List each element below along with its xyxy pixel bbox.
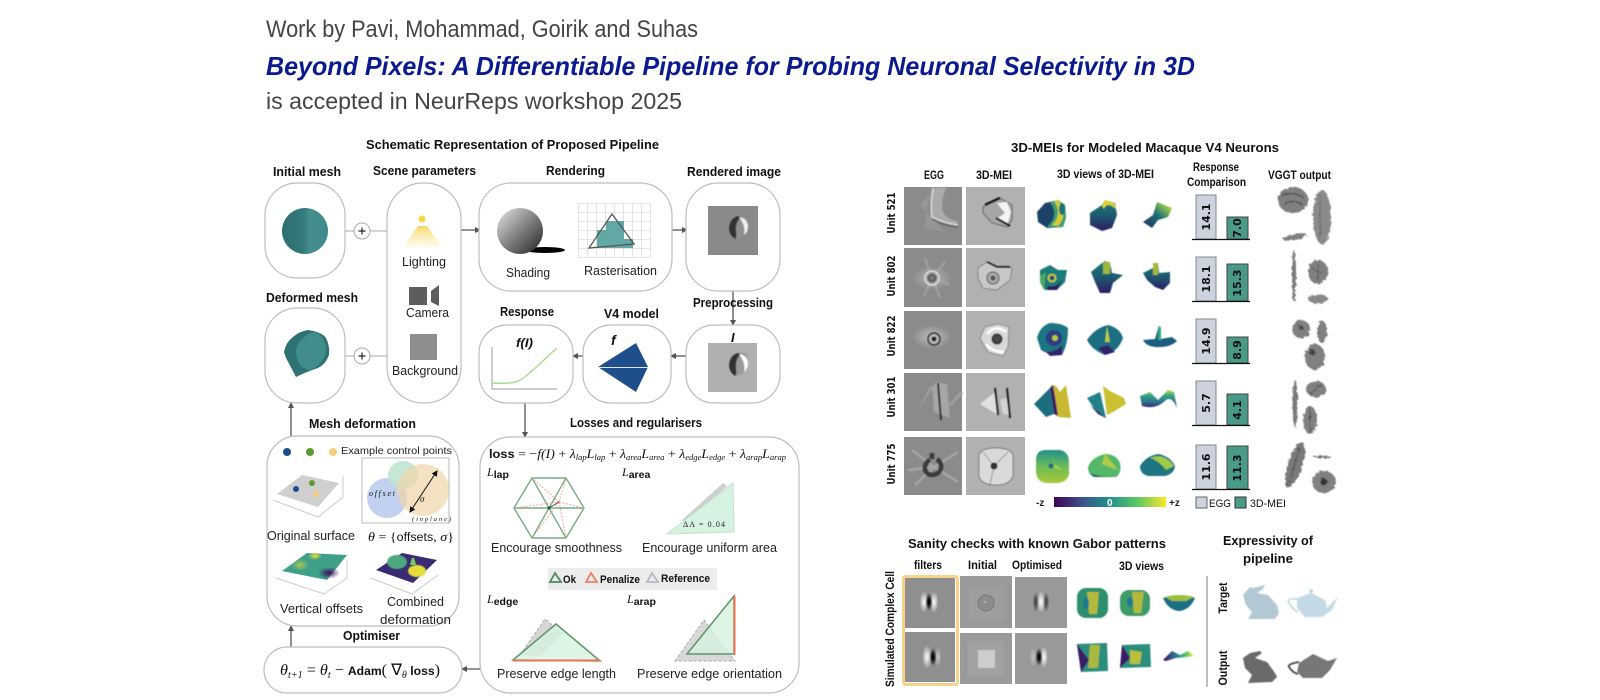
panel: losses and regularisers [480, 415, 799, 693]
image: optimised 1 [1015, 577, 1067, 628]
panel: 3D-MEIs for macaque V4 [885, 140, 1336, 510]
formula: update rule: − [331, 662, 348, 679]
column label: response comparison: Response [1193, 160, 1239, 174]
icon: 3D view 822 c [1143, 325, 1177, 347]
legend: triangle status: Penalize [600, 574, 640, 586]
label: unit 301: Unit 301 [885, 376, 898, 418]
label: original surface: Original surface [267, 528, 355, 543]
chart: response 301: 4.1 [1231, 400, 1244, 420]
icon: 3D view 802 b [1091, 261, 1123, 293]
formula: update rule: ) [435, 662, 440, 679]
label: lighting: Lighting [402, 254, 446, 269]
heading: optimiser: Optimiser [343, 628, 400, 643]
image: VGGT 301 [1292, 379, 1326, 434]
row: unit 822 [885, 311, 1327, 370]
icon: gabor 3D view 2b [1120, 644, 1151, 668]
heading: expressivity: Expressivity of [1223, 533, 1314, 548]
legend: triangle status: Reference [661, 573, 710, 585]
header: paper title: Beyond Pixels: A Differentiable Pipeline for Probing Neuronal Selectivity in 3D [266, 51, 1195, 81]
label: preserve edge orientation: Preserve edge orientation [637, 666, 782, 681]
icon: rasterisation grid [578, 203, 651, 258]
column label: 3D-MEI: 3D-MEI [976, 168, 1012, 182]
label: simulated complex cell: Simulated Complex Cell [885, 571, 897, 687]
formula: loss: edge [709, 453, 726, 462]
heading: losses: Losses and regularisers [570, 415, 702, 430]
formula: update rule: t+1 [288, 670, 303, 681]
column label: 3D views: 3D views of 3D-MEI [1057, 167, 1154, 181]
heading: rendering: Rendering [546, 163, 605, 178]
icon: output bunny [1243, 651, 1277, 683]
icon: gabor 3D view 2a [1077, 643, 1108, 672]
arrow: V4 to response [573, 355, 583, 357]
diagram: area triangle: ΔA = 0.04 [683, 520, 725, 529]
icon: 3D view 521 a [1037, 200, 1066, 228]
heading: expressivity: pipeline [1243, 551, 1293, 566]
panel: response [479, 304, 573, 403]
panel: initial mesh [265, 164, 345, 278]
icon: plus [354, 348, 370, 364]
icon: 3D view 301 c [1140, 390, 1177, 408]
icon: 3D view 301 b [1087, 386, 1126, 418]
label: unit 521: Unit 521 [885, 192, 898, 234]
image: VGGT 822 [1292, 320, 1327, 370]
formula: loss: arap [746, 453, 762, 462]
formula: loss: area [626, 453, 641, 462]
chart: response 775: 11.6 [1200, 453, 1213, 481]
icon: 3D view 802 c [1143, 263, 1170, 290]
legend: triangle status: Ok [563, 574, 577, 586]
heading: scene parameters: Scene parameters [373, 163, 476, 178]
panel: rendering [479, 163, 672, 291]
image: rendered crescent [708, 206, 758, 255]
label: encourage uniform area: Encourage uniform area [642, 540, 778, 555]
icon: 3D view 301 a [1034, 385, 1071, 418]
formula: update rule: θ [280, 662, 288, 679]
column label: filters: filters [914, 558, 942, 572]
diagram: arap triangle [675, 596, 735, 661]
heading: initial mesh: Initial mesh [273, 164, 341, 179]
label: rasterisation: Rasterisation [584, 263, 657, 278]
label: output: Output [1216, 650, 1230, 686]
heading: expressivity [1223, 533, 1314, 566]
chart: response 301 [1192, 381, 1250, 426]
formula: loss: λ [619, 446, 626, 461]
chart: response 822 [1192, 319, 1250, 364]
illustration: original surface [273, 475, 343, 517]
icon: target teapot [1288, 589, 1338, 617]
formula: loss: lap [594, 453, 605, 462]
column label: response comparison: Comparison [1187, 175, 1246, 189]
illustration: offset diagram: σ [420, 494, 425, 504]
chart: response 775 [1192, 445, 1250, 490]
image: 3D-MEI 802 [966, 248, 1025, 307]
arrow: losses to optimiser [462, 668, 480, 670]
image: preprocessed crescent [708, 343, 757, 392]
label: preprocessing: Preprocessing [693, 295, 773, 310]
formula: loss: + [605, 446, 620, 461]
label: target: Target [1216, 582, 1230, 614]
illustration: vertical offsets surface [276, 552, 347, 594]
label: f: f [611, 332, 617, 348]
formula: loss: arap [770, 453, 786, 462]
legend: bar colours: 3D-MEI [1250, 498, 1286, 510]
legend: colour bar: +z [1169, 498, 1180, 509]
illustration: combined deformation surface [371, 553, 438, 594]
label: preserve edge length: Preserve edge length [497, 666, 616, 681]
column label: VGGT output: VGGT output [1268, 168, 1331, 182]
formula: update rule: loss [407, 664, 435, 678]
legend: bar colours: EGG [1209, 498, 1231, 510]
chart: response 521: 7.0 [1231, 218, 1244, 238]
panel: rendered image [686, 164, 781, 291]
label: L area: L [621, 465, 629, 479]
icon: 3D view 775 c [1140, 454, 1175, 476]
image: initial 2 [960, 633, 1012, 684]
label: combined deformation: Combined [387, 594, 444, 609]
image: 3D-MEI 301 [966, 373, 1025, 431]
heading: schematic: Schematic Representation of Proposed Pipeline [366, 137, 659, 152]
icon: gabor 3D view 1a [1077, 588, 1108, 618]
label: shading: Shading [506, 265, 550, 280]
header: authors: Work by Pavi, Mohammad, Goirik and Suhas [266, 16, 698, 43]
heading: deformed mesh: Deformed mesh [266, 290, 358, 305]
formula: loss: edge [685, 453, 702, 462]
column label: initial: Initial [968, 558, 997, 572]
formula: update rule: Adam( ∇ [348, 662, 402, 679]
chart: response curve [492, 347, 557, 389]
icon: gabor 3D view 2c [1163, 651, 1194, 661]
formula: update rule: t [328, 670, 331, 681]
arrow: deformation to deformed mesh [290, 403, 292, 436]
illustration: offset diagram: offset [369, 489, 396, 498]
icon: shaded sphere [497, 208, 565, 254]
chart: response 802: 15.3 [1231, 269, 1244, 297]
illustration: offset diagram [362, 458, 451, 523]
chart: response 521 [1192, 195, 1250, 240]
image: VGGT 802 [1292, 250, 1328, 304]
chart: response 521: 14.1 [1200, 203, 1213, 231]
panel: Gabor sanity checks [885, 536, 1207, 687]
panel: expressivity of pipeline [1216, 533, 1338, 686]
diagram: edge triangle [513, 619, 600, 661]
formula: loss: + [725, 446, 740, 461]
row: unit 802 [885, 248, 1328, 307]
chart: response 301: 5.7 [1200, 393, 1213, 413]
label: L area: area [629, 469, 650, 481]
arrow: scene to rendering [461, 229, 480, 231]
formula: loss: L [761, 446, 770, 461]
label: L edge: edge [494, 596, 518, 608]
chart: response 775: 11.3 [1231, 454, 1244, 482]
row: unit 301 [885, 373, 1326, 434]
heading: rendered image: Rendered image [687, 164, 781, 179]
legend: bar colours [1196, 497, 1286, 510]
label: L arap: L [626, 592, 634, 606]
image: EGG 521 [904, 187, 962, 245]
column label: 3D views: 3D views [1119, 559, 1164, 573]
label: vertical offsets: Vertical offsets [280, 601, 363, 616]
icon: sphere mesh [282, 208, 328, 254]
label: unit 822: Unit 822 [885, 316, 898, 356]
icon: 3D view 521 b [1090, 200, 1117, 231]
legend: example control points: Example control points [341, 445, 452, 457]
image: EGG 822 [904, 311, 962, 369]
label: camera: Camera [406, 305, 450, 320]
formula: loss: + [664, 446, 679, 461]
formula: loss: area [649, 453, 664, 462]
label: background: Background [392, 363, 458, 378]
heading: mesh deformation: Mesh deformation [309, 416, 416, 431]
row: unit 775 [885, 437, 1336, 495]
image: VGGT 775 [1281, 440, 1336, 493]
formula: loss: loss = −f(I) + λ [489, 446, 575, 461]
formula: loss: λ [739, 446, 746, 461]
chart: response 802: 18.1 [1200, 265, 1213, 293]
connector lines [345, 231, 387, 356]
illustration: offset diagram: (inplane) [412, 516, 451, 523]
legend: colour bar: 0 [1107, 498, 1113, 509]
column label: optimised: Optimised [1012, 558, 1062, 572]
panel: schematic pipeline [264, 137, 799, 693]
icon: network kite [598, 343, 648, 392]
image: optimised 2 [1015, 633, 1067, 684]
legend: colour bar: -z [1036, 498, 1044, 509]
formula: update rule: = [303, 662, 320, 679]
formula: loss: L [586, 446, 594, 461]
arrow: rendered image to preprocessing [732, 291, 734, 325]
icon: 3D view 521 c [1143, 202, 1172, 228]
image: EGG 775 [904, 437, 962, 495]
panel: V4 model [583, 306, 671, 403]
heading: sanity checks: Sanity checks with known Gabor patterns [908, 536, 1166, 551]
diagram: laplacian hexagon [514, 478, 584, 538]
heading: V4 model: V4 model [604, 306, 659, 321]
formula: update rule: θ [320, 662, 328, 679]
label: deformation: deformation [380, 612, 451, 627]
formula: loss: L [700, 446, 709, 461]
heading: response: Response [500, 304, 554, 319]
icon: lighting [403, 216, 442, 247]
icon: 3D view 822 b [1087, 325, 1123, 355]
image: VGGT 521 [1278, 187, 1331, 244]
image: 3D-MEI 775 [966, 437, 1025, 495]
label: theta parameters: θ = {offsets, σ} [368, 529, 454, 544]
legend: colour bar [1036, 497, 1180, 509]
label: encourage smoothness: Encourage smoothness [491, 540, 622, 555]
header: acceptance note: is accepted in NeurReps workshop 2025 [266, 88, 682, 114]
icon: camera [409, 285, 439, 306]
icon: gabor 3D view 1b [1120, 590, 1150, 616]
heading: 3D-MEIs: 3D-MEIs for Modeled Macaque V4 Neurons [1011, 140, 1279, 155]
arrow: optimiser to deformation [290, 626, 292, 647]
icon: output teapot [1289, 654, 1337, 678]
image: 3D-MEI 822 [966, 311, 1025, 369]
arrow: preprocessing to V4 [671, 355, 686, 357]
panel: mesh deformation [267, 416, 459, 627]
icon: background [410, 334, 437, 360]
panel: optimiser [264, 628, 462, 693]
frame: highlighted filters [904, 576, 958, 684]
chart: response 822: 8.9 [1231, 340, 1244, 360]
icon: gabor 3D view 1c [1163, 595, 1195, 611]
image: initial 1 [960, 576, 1012, 628]
panel: scene parameters [373, 163, 476, 403]
icon: 3D view 802 a [1040, 265, 1067, 290]
image: filter 1 [905, 578, 955, 628]
label: unit 802: Unit 802 [885, 256, 898, 296]
image: filter 2 [905, 632, 955, 682]
icon: plus [354, 223, 370, 239]
label: L edge: L [486, 592, 494, 606]
icon: 3D view 775 a [1036, 450, 1069, 483]
panel: preprocessed image [686, 325, 780, 403]
formula: update rule: θ [402, 670, 407, 681]
legend: triangle status [548, 568, 717, 590]
legend: example control points [283, 445, 452, 457]
icon: target bunny [1243, 585, 1279, 619]
label: f(I): f(I) [516, 336, 533, 350]
row: unit 521 [885, 187, 1331, 245]
image: EGG 802 [904, 248, 962, 307]
diagram: area triangle [667, 483, 734, 534]
label: unit 775: Unit 775 [885, 444, 898, 484]
column label: response comparison [1187, 160, 1246, 189]
chart: response 822: 14.9 [1200, 327, 1213, 355]
label: L arap: arap [634, 596, 656, 608]
formula: loss: L [640, 446, 649, 461]
label: L lap: L [486, 465, 494, 479]
arrow: rendering to rendered image [672, 229, 687, 231]
label: L lap: lap [494, 469, 509, 481]
label: I: I [731, 330, 735, 345]
image: EGG 301 [904, 373, 962, 431]
image: 3D-MEI 521 [966, 187, 1025, 245]
arrow: response to losses [524, 403, 526, 437]
formula: loss: lap [576, 453, 587, 462]
icon: 3D view 822 a [1037, 323, 1068, 356]
icon: deformed mesh shape [284, 330, 329, 377]
chart: response 802 [1192, 257, 1250, 302]
panel: deformed mesh [265, 290, 358, 403]
divider [1206, 576, 1208, 687]
formula: loss: λ [678, 446, 686, 461]
icon: 3D view 775 b [1088, 453, 1120, 477]
column label: EGG: EGG [924, 168, 944, 182]
